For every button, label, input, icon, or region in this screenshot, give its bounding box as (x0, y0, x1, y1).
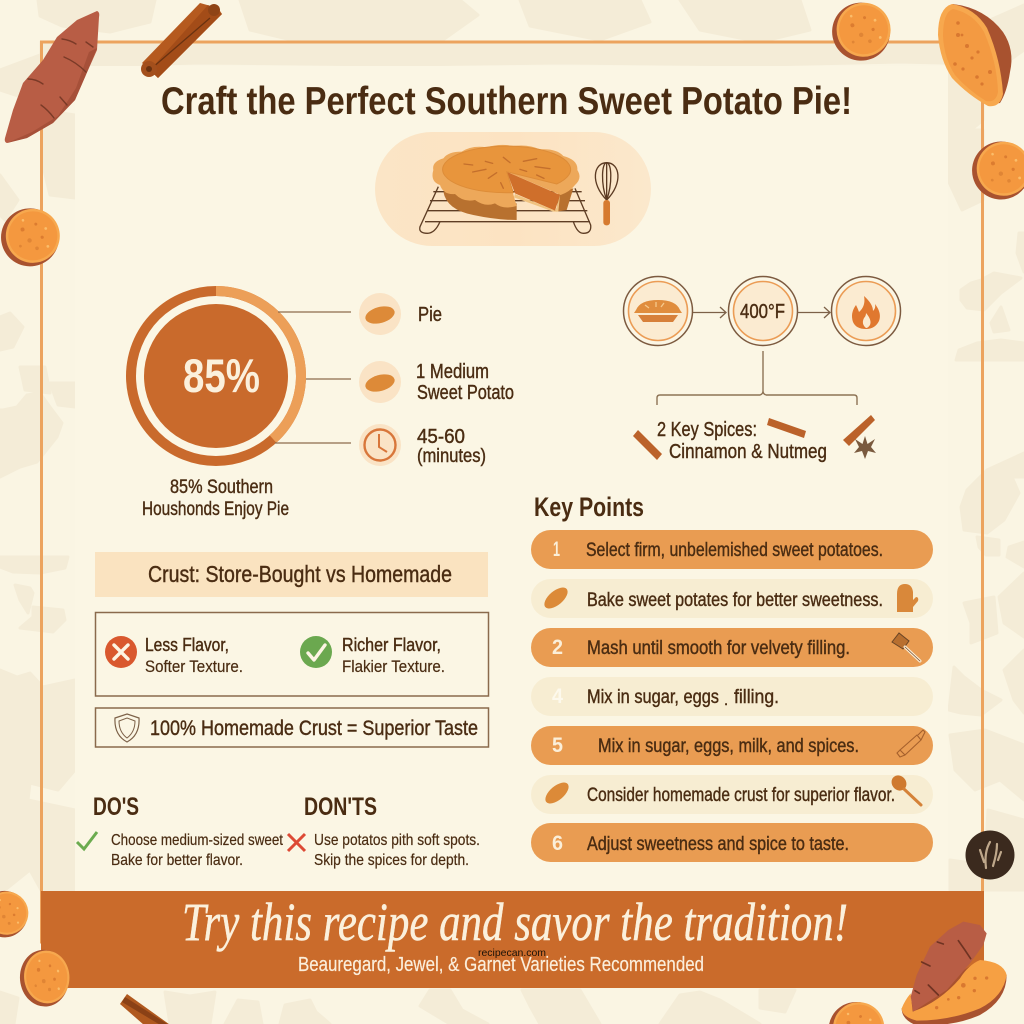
row 3: 2 (552, 636, 563, 659)
legend: sweet potato (359, 361, 514, 404)
store-bought text: Less Flavor, (145, 635, 229, 655)
flow: arrow 2 (797, 307, 830, 318)
row 3 (531, 628, 933, 667)
row 7: 6 (552, 832, 563, 855)
percent value: 85% (183, 349, 260, 402)
store-bought: cross (105, 636, 137, 668)
corner decoration: sweet potato top left (5, 11, 99, 143)
decoration: slice bottom left lower (18, 948, 72, 1009)
hero: pie on cooling rack (375, 132, 651, 246)
row 7: Adjust sweetness and spice to taste. (587, 834, 849, 855)
flow: fire step (832, 276, 900, 346)
donut stat: 85% (131, 291, 301, 461)
homemade crust banner (96, 708, 488, 747)
legend: time: (minutes) (417, 446, 486, 467)
decoration: slice bottom left upper (0, 889, 30, 939)
homemade crust banner: 100% Homemade Crust = Superior Taste (150, 717, 478, 740)
key spices label: Cinnamon & Nutmeg (669, 441, 827, 463)
corner decoration: slice right (966, 135, 1024, 206)
bracket connector (657, 351, 857, 405)
crust header (95, 552, 488, 597)
homemade text: Richer Flavor, (342, 635, 441, 655)
whole potato (911, 922, 987, 1012)
row 1 (531, 530, 933, 569)
hero pill background (375, 132, 651, 246)
title: Craft the Perfect Southern Sweet Potato Pie! (161, 80, 852, 123)
do's column: Choose medium-sized sweet (111, 832, 283, 849)
donut caption (142, 477, 289, 520)
decoration: nutmeg (966, 830, 1014, 880)
row 3: Mash until smooth for velvety filling. (587, 638, 850, 659)
icon: cinnamon left (633, 430, 662, 460)
row 4: filling. (734, 687, 779, 708)
ring light (216, 291, 301, 439)
leader lines (275, 312, 351, 443)
legend: sweet potato: Sweet Potato (417, 382, 514, 404)
key points heading: Key Points (534, 492, 644, 522)
ring dark (131, 291, 301, 461)
corner decoration: cinnamon stick top (141, 3, 222, 78)
corner decoration: sweet potatoes bottom right (902, 922, 1007, 1024)
legend: sweet potato: 1 Medium (416, 361, 489, 383)
do's column: Bake for better flavor. (111, 852, 243, 869)
corner decoration: halved potato top right (938, 4, 1011, 106)
flow: pie step (624, 276, 692, 346)
decoration: cinnamon stick bottom (120, 994, 180, 1024)
store-bought text: Softer Texture. (145, 657, 243, 676)
legend: time: 45-60 (417, 426, 465, 448)
row 5 (531, 726, 933, 765)
homemade text (342, 635, 445, 676)
don'ts column: Skip the spices for depth. (314, 852, 469, 869)
row 1: Select firm, unbelemished sweet potatoes. (586, 540, 883, 561)
main panel (75, 66, 948, 891)
row 2: Bake sweet potates for better sweetness. (587, 590, 883, 611)
icon: star anise (854, 436, 876, 459)
whisk (595, 163, 618, 225)
corner decoration: slice top (824, 0, 899, 69)
row 4: 4 (552, 685, 563, 708)
store-bought text (145, 635, 243, 676)
crust header: Crust: Store-Bought vs Homemade (148, 561, 452, 587)
corner decoration: slice left (0, 204, 65, 271)
legend: time (359, 424, 486, 467)
row 5: Mix in sugar, eggs, milk, and spices. (598, 736, 859, 757)
key points list (531, 530, 933, 862)
row 7 (531, 823, 933, 862)
icon: cinnamon middle (767, 418, 806, 438)
icon: cinnamon right (843, 415, 875, 446)
don'ts column (288, 793, 480, 869)
don'ts column: Use potatos pith soft spots. (314, 832, 480, 849)
decoration: slice bottom (822, 996, 891, 1024)
donut caption: Houshonds Enjoy Pie (142, 499, 289, 520)
pie and rack illustration (420, 145, 591, 233)
row 4: . (724, 692, 728, 709)
homemade: check (300, 636, 332, 668)
flow: 400F step (728, 276, 798, 346)
footer banner (41, 891, 984, 988)
crust comparison box (96, 612, 488, 696)
row 6: Consider homemade crust for superior flavor. (587, 785, 895, 806)
halved potato (902, 960, 1007, 1024)
flow: 400F step: 400°F (740, 301, 785, 323)
key spices label (657, 419, 827, 463)
legend: pie: Pie (418, 304, 442, 326)
don'ts column: DON'TS (304, 793, 377, 821)
do's column: DO'S (93, 793, 139, 821)
legend: pie (359, 293, 442, 335)
flow: arrow 1 (693, 307, 726, 318)
row 2 (531, 579, 933, 618)
do's column (77, 793, 283, 869)
row 4: Mix in sugar, eggs (587, 687, 719, 708)
center disc (144, 304, 288, 448)
watermark: recipecan.com (478, 947, 546, 959)
key spices label: 2 Key Spices: (657, 419, 757, 441)
footer subtitle: Beauregard, Jewel, & Garnet Varieties Recommended (298, 954, 704, 976)
row 4 (531, 677, 933, 716)
footer headline: Try this recipe and savor the tradition! (182, 892, 848, 952)
row 6 (531, 772, 933, 814)
row 1: 1 (553, 538, 560, 561)
homemade text: Flakier Texture. (342, 657, 445, 676)
row 5: 5 (552, 734, 563, 757)
donut caption: 85% Southern (170, 477, 273, 498)
